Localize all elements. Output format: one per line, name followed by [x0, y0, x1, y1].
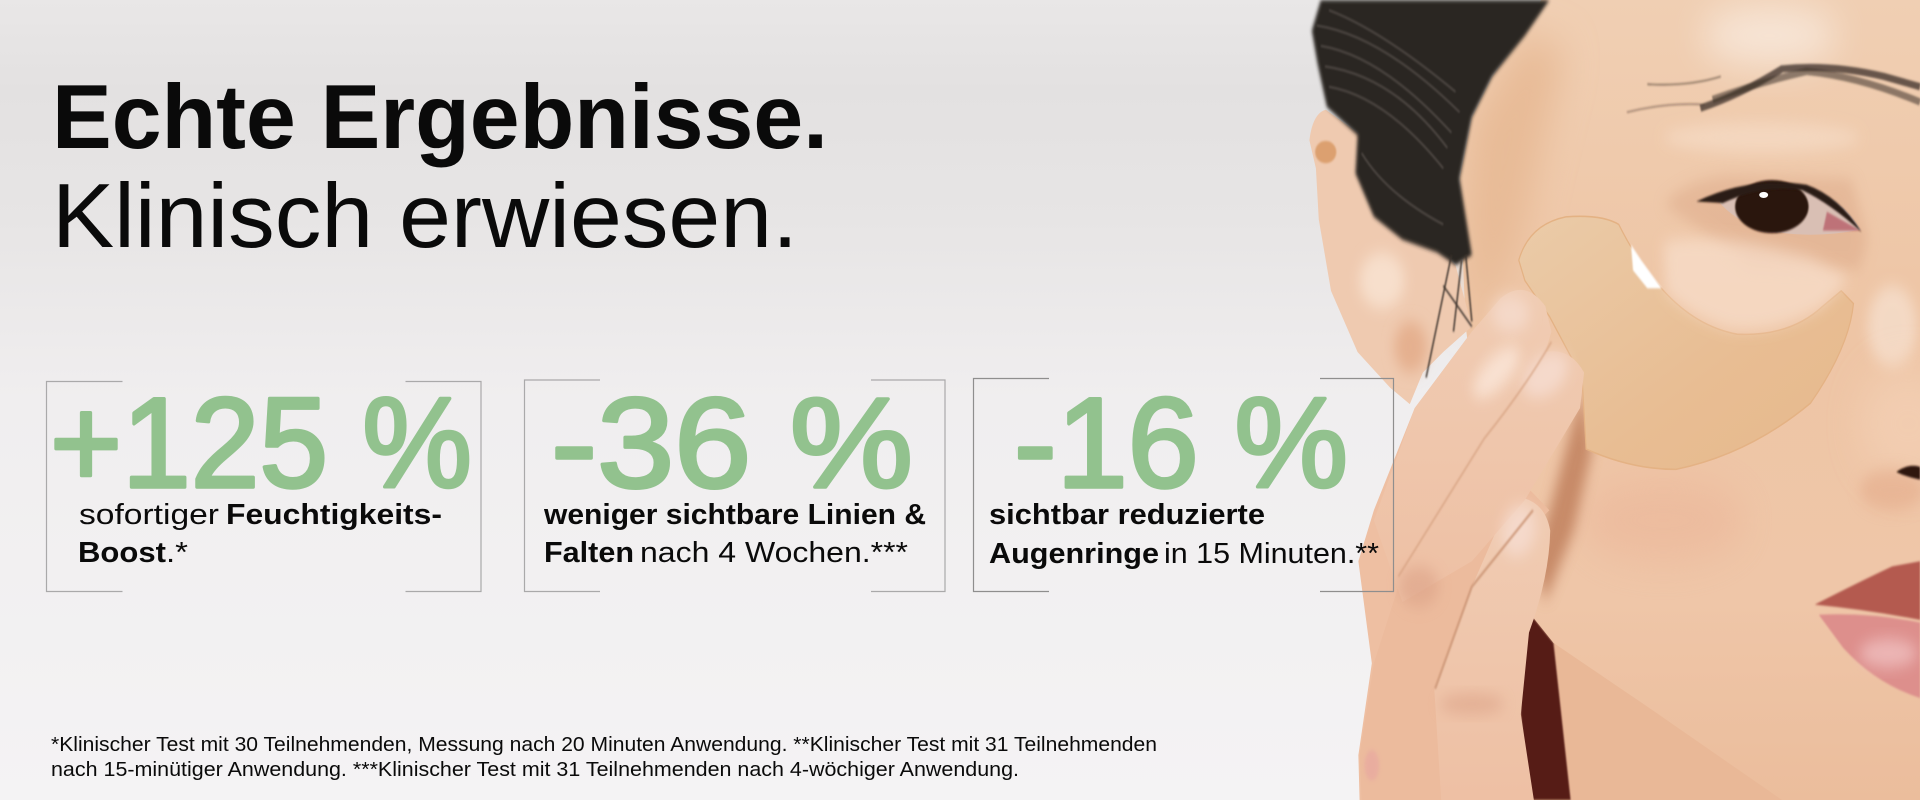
face skin — [1460, 0, 1920, 800]
caption 1: Feuchtigkeits- — [226, 499, 442, 531]
frame 3 — [974, 378, 1394, 592]
caption 3: sichtbar reduzierte — [989, 499, 1265, 531]
eyebrow — [1627, 67, 1920, 112]
caption 1: Boost — [78, 537, 166, 569]
panel: stat 125 percent — [46, 372, 481, 592]
ear — [1309, 110, 1472, 404]
caption 1: .* — [166, 537, 188, 569]
figure 16 percent: -16 % — [1014, 372, 1348, 515]
caption 3: in 15 Minuten.** — [1164, 538, 1379, 570]
frame 1 — [46, 382, 481, 592]
caption 1: sofortiger — [79, 499, 219, 531]
hair — [1312, 0, 1549, 378]
neck and shadow — [1509, 587, 1818, 800]
caption 2: weniger sichtbare Linien & — [543, 499, 926, 531]
title: Klinisch erwiesen. — [52, 166, 798, 267]
eye — [1696, 180, 1862, 235]
hand — [1358, 290, 1584, 800]
title: Echte Ergebnisse. — [52, 67, 828, 168]
panel: stat 36 percent — [524, 372, 945, 592]
lips — [1815, 561, 1920, 698]
footnotes: nach 15-minütiger Anwendung. ***Klinischer Test mit 31 Teilnehmenden nach 4-wöchiger Anwendung. — [51, 758, 1019, 781]
photo: face with under-eye patch — [1309, 0, 1920, 800]
caption 2: nach 4 Wochen.*** — [640, 537, 908, 569]
caption 3: Augenringe — [989, 538, 1159, 570]
caption 2 — [543, 499, 926, 569]
under-eye patch — [1519, 216, 1853, 469]
title — [52, 67, 828, 267]
frame 2 — [524, 380, 945, 592]
figure 125 percent: +125 % — [50, 372, 472, 515]
nose and nostril — [1860, 466, 1920, 510]
footnotes: *Klinischer Test mit 30 Teilnehmenden, Messung nach 20 Minuten Anwendung. **Klinischer Test mit 31 Teilnehmenden — [51, 733, 1157, 756]
caption 3 — [989, 499, 1379, 570]
footnotes — [51, 733, 1157, 781]
caption 2: Falten — [544, 537, 634, 569]
panel: stat 16 percent — [974, 372, 1394, 592]
figure 36 percent: -36 % — [551, 372, 913, 515]
caption 1 — [78, 499, 442, 569]
